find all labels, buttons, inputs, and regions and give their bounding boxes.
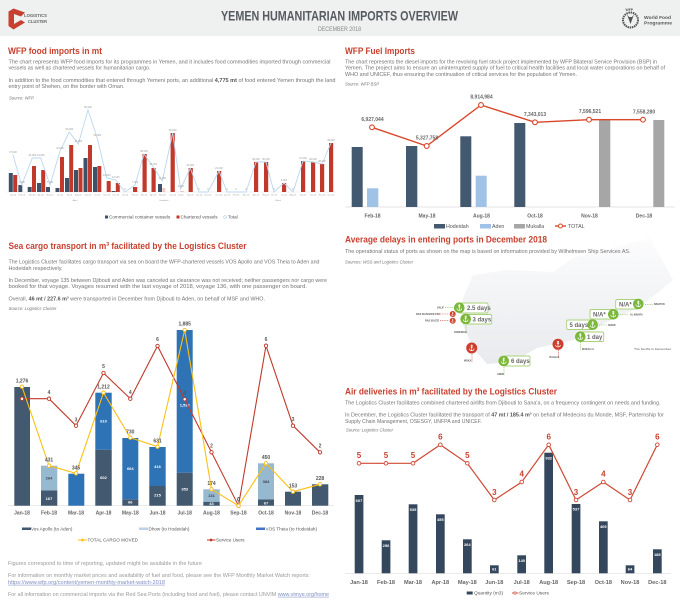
segment labels: 43 xyxy=(209,501,214,506)
text block: food imports description xyxy=(8,60,336,90)
bar value labels: 455 xyxy=(437,517,444,522)
segment labels: 664 xyxy=(127,466,134,471)
x axis labels: sea cargo: Feb-18 xyxy=(41,510,57,516)
icon: World Food Programme logo xyxy=(623,8,673,28)
x axis labels: fuel xyxy=(364,214,652,220)
segment labels: 384 xyxy=(263,479,270,484)
x axis labels: food imports: May-16 xyxy=(263,194,270,196)
x axis labels: sea cargo: Jan-18 xyxy=(14,510,30,516)
bars: Dhow xyxy=(41,463,274,502)
value labels: service users: 4 xyxy=(48,390,51,396)
port: Aden 6 days xyxy=(497,356,530,376)
legend: food imports: Total xyxy=(228,215,238,220)
value labels: service users: 5 xyxy=(384,451,389,460)
legend: sea cargo: Vos Apollo (to Aden) xyxy=(31,527,73,532)
legend: air deliveries: Quantity (m3) xyxy=(474,591,503,597)
value labels: service users: 2 xyxy=(210,444,213,450)
footer notes xyxy=(8,561,329,598)
chart: air deliveries xyxy=(345,432,671,586)
text block: fuel imports description: WHO and UNICEF, thus ensuring the continuation of critical services for the population of Yemen. xyxy=(345,72,577,78)
port: Hodeidah 3 days xyxy=(454,314,492,334)
x axis labels: food imports: Dec-16 xyxy=(216,194,223,196)
legend: sea cargo: Service Users xyxy=(216,538,245,543)
x axis labels: food imports: Jan-16 xyxy=(224,194,231,196)
port: Shihr 5 days xyxy=(567,319,616,330)
heading: fuel imports: WFP Fuel Imports xyxy=(345,46,415,57)
x axis labels: food imports: Dec-16 xyxy=(328,194,335,196)
x axis labels: food imports: Jul-16 xyxy=(66,194,73,196)
text block: food imports description: entry point of Shehen, on the border with Oman. xyxy=(8,84,124,90)
x axis labels: food imports: Nov-16 xyxy=(319,194,326,196)
legend: fuel imports xyxy=(434,224,585,230)
legend: air deliveries: Service Users xyxy=(519,591,549,597)
port: Shihr 5 days: 5 days xyxy=(570,323,589,329)
value labels: total: 0 xyxy=(292,188,294,191)
legend: fuel imports: Mukalla xyxy=(526,224,544,230)
source: food imports: Source: WFP xyxy=(9,96,34,100)
value labels: service users: 5 xyxy=(465,451,470,460)
bar value labels: 535 xyxy=(410,507,417,512)
port: Ras Isa closed xyxy=(425,318,456,324)
port: Hodeidah 3 days: 3 days xyxy=(472,317,492,323)
value labels: total: 38,000 xyxy=(140,150,148,153)
x axis labels: food imports: Jun-16 xyxy=(170,194,177,196)
bar value labels: 537 xyxy=(573,506,580,512)
link: market watch: https://www.wfp.org/content/yemen-monthly-market-watch-2018 xyxy=(8,580,165,586)
x axis labels: air deliveries: Dec-18 xyxy=(648,580,666,586)
value labels: total: 3,000 xyxy=(177,185,184,188)
value labels: total: 59,000 xyxy=(169,129,177,132)
bar value labels: 932 xyxy=(545,456,553,460)
legend: food imports xyxy=(105,215,238,220)
panel: WFP fuel imports xyxy=(342,42,680,230)
x axis labels: sea cargo: Oct-18 xyxy=(258,510,274,516)
x axis labels: fuel: Nov-18 xyxy=(581,214,598,220)
x axis labels: air deliveries: Nov-18 xyxy=(621,580,639,586)
value labels: total: 30,000 xyxy=(262,158,270,161)
x axis labels: air deliveries: Oct-18 xyxy=(595,580,612,586)
value labels: total cargo: 1,276 xyxy=(16,378,28,384)
x axis labels: sea cargo: May-18 xyxy=(122,510,139,516)
port: Balhaf closed: BALHAF xyxy=(550,356,560,359)
port: Al Nashima N/A: AL MAHRA xyxy=(630,313,643,316)
value labels: total: 34,000 xyxy=(37,154,45,157)
value labels: service users xyxy=(357,432,660,497)
text block: food imports description: vessels as well as chartered vessels for humanitarian cargo. xyxy=(8,66,151,72)
value labels: service users: 3 xyxy=(492,488,497,497)
value labels: total: 28,000 xyxy=(318,160,326,163)
value labels: service users: 3 xyxy=(292,417,295,423)
value labels: total xyxy=(9,106,335,191)
x axis labels: sea cargo: Dec-18 xyxy=(312,510,328,516)
segment labels: 67 xyxy=(264,500,269,506)
line: total cargo moved xyxy=(20,328,322,507)
x axis labels: food imports: Jul-16 xyxy=(281,194,288,196)
value labels: total: 7,596,521 xyxy=(579,109,601,115)
x axis labels: food imports: May-16 xyxy=(47,194,54,196)
bar value labels xyxy=(356,456,661,572)
line: service users xyxy=(20,344,322,507)
title: YEMEN HUMANITARIAN IMPORTS OVERVIEW xyxy=(221,8,459,24)
port: Nishtun N/A: N/A* xyxy=(619,302,632,308)
bars: quantity xyxy=(355,453,662,573)
chart: fuel imports xyxy=(345,94,675,220)
text block: food imports description: The chart represents WFP food imports for its programmes in Yemen, and it includes food commodities imported through commercial xyxy=(8,60,330,66)
value labels: total: 30,000 xyxy=(309,158,317,161)
value labels: total xyxy=(361,94,655,142)
port: Saleef 2.5 days: 2.5 days xyxy=(467,306,491,312)
source: sea cargo: Source: Logistics Cluster xyxy=(8,306,57,311)
x axis labels: food imports: Jun-16 xyxy=(271,194,278,196)
legend: food imports: Chartered vessels xyxy=(180,215,218,220)
source: fuel imports: Source: WFP BSP xyxy=(345,82,379,86)
x axis labels: food imports: Mar-16 xyxy=(29,194,36,196)
segment labels: 167 xyxy=(46,496,53,501)
value labels: service users: 4 xyxy=(601,470,606,478)
value labels: total: 7,000 xyxy=(19,181,25,184)
segment labels: 215 xyxy=(154,492,162,498)
bar value labels: 61 xyxy=(492,566,497,572)
bar value labels: 64 xyxy=(628,566,633,572)
x axis labels: food imports: Aug-16 xyxy=(290,194,297,196)
legend: air deliveries xyxy=(467,591,549,597)
text block: sea cargo description: booked for that voyage. Voyages resumed with the last voyage of 2018, voyage 136, with one passenger on board. xyxy=(8,284,307,290)
x axis labels: food imports: Hodeidah xyxy=(160,200,169,202)
segment labels xyxy=(46,402,270,506)
line: service users xyxy=(357,443,659,502)
value labels: service users: 5 xyxy=(411,451,416,460)
value labels: total cargo: 228 xyxy=(316,476,324,482)
x axis labels: air deliveries: Jun-18 xyxy=(485,580,503,586)
value labels: total: 0 xyxy=(226,188,228,191)
text block: air deliveries description: Supply Chain Management, OSESGY, UNFPA and UNICEF. xyxy=(345,419,482,425)
x axis labels: air deliveries xyxy=(350,580,666,586)
value labels: total: 0 xyxy=(273,188,275,191)
legend: fuel imports: Aden xyxy=(492,224,504,230)
value labels: service users: 4 xyxy=(519,470,524,478)
x axis labels: food imports: Sep-16 xyxy=(187,194,194,196)
panel: WFP food imports xyxy=(0,42,340,222)
bars: VOS Theia xyxy=(68,330,193,506)
footer notes: For information on monthly market prices and availability of fuel and food, please see the WFP Monthly Market Watch reports: xyxy=(8,573,310,579)
port: Mokha closed: MOKA xyxy=(464,360,472,362)
x axis labels: sea cargo xyxy=(14,510,328,516)
value labels: service users: 5 xyxy=(102,364,105,370)
x axis labels: air deliveries: Apr-18 xyxy=(431,580,449,586)
map: Yemen xyxy=(463,238,673,364)
text block: sea cargo description: Hodeidah respectively. xyxy=(8,266,62,272)
value labels: total: 37,000 xyxy=(9,151,17,154)
x axis labels: food imports: Jun-16 xyxy=(57,194,64,196)
x axis labels: food imports: Jan-16 xyxy=(122,194,129,196)
x axis labels: food imports: Nov-16 xyxy=(103,194,111,196)
value labels: total: 12,000 xyxy=(112,176,120,179)
port: Al Nashima N/A xyxy=(590,309,643,320)
bar value labels: 264 xyxy=(464,542,471,547)
value labels: service users: 2 xyxy=(319,444,322,450)
bars: commercial container vessels xyxy=(9,158,162,192)
segment labels: 416 xyxy=(154,464,162,469)
legend: food imports: Commercial container vessels xyxy=(109,215,171,220)
text block: delays description: The operational status of ports as shown on the map is based on information provided by Wilhelmsen Ship Services AS. xyxy=(345,249,630,255)
footnote: no berths: *No berths in December xyxy=(634,347,671,351)
x axis labels: food imports: Jul-16 xyxy=(178,194,184,196)
subtitle: DECEMBER 2018 xyxy=(318,26,361,33)
legend: fuel imports: TOTAL xyxy=(568,224,585,230)
bar value labels: 140 xyxy=(518,558,526,563)
text block: sea cargo description xyxy=(8,260,327,302)
value labels: service users: 4 xyxy=(21,390,24,396)
x axis labels: food imports: Oct-16 xyxy=(196,194,203,196)
segment labels: 131 xyxy=(208,493,216,498)
value labels: total: 31,000 xyxy=(299,157,307,160)
value labels: total cargo xyxy=(16,322,324,504)
value labels: service users: 4 xyxy=(129,390,132,396)
text block: air deliveries description: In December, the Logistics Cluster facilitated the transport of 47 mt / 185.4 m³ on behalf of Medecins du Monde, MSF, Parternship for xyxy=(345,412,664,418)
x axis labels: fuel: May-18 xyxy=(419,214,436,220)
source: air deliveries: Source: Logistics Cluster xyxy=(346,428,394,432)
segment labels: 610 xyxy=(100,418,108,424)
value labels: total: 21,000 xyxy=(215,167,223,170)
value labels: total cargo: 450 xyxy=(262,455,270,461)
port: Shihr 5 days: SHIHR xyxy=(608,324,616,327)
bar value labels: 185 xyxy=(654,552,661,557)
value labels: total: 7,343,013 xyxy=(524,112,546,118)
value labels: service users: 5 xyxy=(357,451,362,460)
value labels: total: 8,914,984 xyxy=(470,94,493,100)
text block: sea cargo description: In December, voyage 135 between Djibouti and Aden was canceled as clearance was not received; neither passengers nor cargo were xyxy=(8,278,327,284)
value labels: service users: 3 xyxy=(75,418,78,424)
bars: VOS Apollo xyxy=(14,387,328,506)
value labels: total: 0 xyxy=(198,188,200,191)
segment labels: 66 xyxy=(128,499,133,504)
value labels: total cargo: 1,212 xyxy=(97,384,110,390)
value labels: total: 0 xyxy=(124,188,126,191)
value labels: service users: 6 xyxy=(655,432,660,442)
segment labels: 353 xyxy=(181,486,189,492)
x axis labels: food imports: Apr-16 xyxy=(38,194,45,196)
port: Nishtun N/A xyxy=(616,299,665,309)
icon: World Food Programme logo: World Food xyxy=(644,15,671,20)
port: Hodeidah 3 days: HODEIDAH xyxy=(454,331,467,334)
panel: average port delays map xyxy=(342,232,680,378)
x axis labels: food imports: Nov-16 xyxy=(205,194,212,196)
x axis labels: sea cargo: Apr-18 xyxy=(96,510,112,516)
chart: food imports bars and total line xyxy=(6,106,336,202)
x axis labels: fuel: Oct-18 xyxy=(527,214,543,220)
value labels: service users: 3 xyxy=(628,488,633,497)
line: total xyxy=(13,110,331,192)
value labels: service users: 6 xyxy=(265,337,268,343)
port: Mukalla 1 day: MUKALLA xyxy=(582,348,594,351)
value labels: total: 34,000 xyxy=(28,154,37,157)
value labels: total cargo: 345 xyxy=(72,466,80,472)
line: total xyxy=(370,103,645,148)
x axis labels: food imports: Saleef xyxy=(275,200,281,202)
x axis labels: air deliveries: Feb-18 xyxy=(377,580,395,586)
heading: delays: Average delays in entering ports in December 2018 xyxy=(345,234,547,246)
port: Mukalla 1 day: 1 day xyxy=(587,335,603,341)
value labels: service users: 0 xyxy=(237,497,240,503)
value labels: total: 0 xyxy=(235,188,237,191)
icon: Logistics Cluster logo xyxy=(8,8,48,30)
legend: sea cargo: VOS Theia (to Hodeidah) xyxy=(266,527,317,532)
x axis labels: food imports: Feb-16 xyxy=(233,194,240,196)
icon: Logistics Cluster logo: LOGISTICS xyxy=(24,13,47,18)
icon: Logistics Cluster logo: CLUSTER xyxy=(28,19,48,24)
x axis labels: fuel: Dec-18 xyxy=(636,214,652,220)
heading: food imports: WFP food imports in mt xyxy=(8,46,103,57)
value labels: total: 7,000 xyxy=(132,181,139,184)
port: Nishtun N/A: NISHTUN xyxy=(654,303,665,306)
value labels: total cargo: 174 xyxy=(207,481,216,487)
x axis labels: air deliveries: Sep-18 xyxy=(567,580,585,586)
x axis labels: food imports: Apr-16 xyxy=(253,194,260,196)
chart: sea cargo xyxy=(8,322,334,516)
value labels: total: 11,000 xyxy=(159,177,167,180)
x axis labels: air deliveries: Aug-18 xyxy=(539,580,558,586)
x axis labels: sea cargo: Mar-18 xyxy=(68,510,84,516)
bar value labels: 607 xyxy=(356,498,363,503)
value labels: total: 54,000 xyxy=(93,134,102,137)
bars: Mukalla xyxy=(599,120,664,207)
x axis labels: food imports: Sep-16 xyxy=(85,194,92,196)
icon: World Food Programme logo: WFP xyxy=(626,8,634,12)
text block: food imports description: In addition to the food commodities that entered through Yemeni ports, an additional 4,775 mt of food entered Yemen through the land xyxy=(8,78,336,84)
x axis labels: food imports: Mar-16 xyxy=(141,194,148,196)
value labels: total: 0 xyxy=(245,188,247,191)
value labels: total: 60,000 xyxy=(65,128,74,131)
bars: Hodeidah xyxy=(352,123,525,207)
header band xyxy=(0,0,680,36)
x axis labels: food imports: Oct-16 xyxy=(94,194,101,196)
value labels: service users: 6 xyxy=(438,432,443,442)
value labels: total: 41,000 xyxy=(56,147,64,150)
contact line with link: For all information on commercial imports via the Red Sea Ports (including food and fuel), please contact UNVIM www.vimye.org/home xyxy=(8,592,329,598)
panel: sea cargo transport xyxy=(0,238,340,548)
value labels: service users xyxy=(21,337,322,503)
panel: air deliveries xyxy=(342,384,680,605)
value labels: service users: 4 xyxy=(183,391,186,397)
x axis labels: food imports: Mar-16 xyxy=(243,194,250,196)
value labels: total: 7,000 xyxy=(47,181,54,184)
x axis labels: sea cargo: Aug-18 xyxy=(203,510,220,516)
x axis labels: food imports: Aug-16 xyxy=(75,194,82,196)
value labels: total: 5,327,758 xyxy=(416,136,438,142)
source: delays: Sources: WSS and Logistics Cluster xyxy=(345,260,414,264)
x axis labels: air deliveries: Jan-18 xyxy=(350,580,368,586)
value labels: total: 25,000 xyxy=(149,163,158,166)
x axis labels: food imports: Feb-16 xyxy=(18,194,26,196)
port: Aden 6 days: ADEN xyxy=(497,373,504,376)
value labels: total: 24,000 xyxy=(186,164,195,167)
x axis labels: food imports: Dec-16 xyxy=(112,194,120,196)
text block: air deliveries description: The Logistics Cluster facilitates combined chartered airlifts from Djibouti to Sana'a, on a frequency contingent on needs and funding. xyxy=(345,400,661,406)
value labels: service users: 3 xyxy=(574,488,579,497)
x axis labels: sea cargo: Jul-18 xyxy=(177,510,192,516)
port: Ras Isa Safer FSO closed: RAS ISA/SAFER FSO xyxy=(416,313,440,316)
legend: sea cargo xyxy=(22,527,317,543)
port: Saleef 2.5 days xyxy=(437,302,491,313)
value labels: total: 30,000 xyxy=(252,158,260,161)
x axis labels: food imports: Sep-16 xyxy=(300,194,307,196)
heading: sea cargo: Sea cargo transport in m³ facilitated by the Logistics Cluster xyxy=(8,241,247,252)
legend: fuel imports: Hodeidah xyxy=(446,224,469,230)
text block: air deliveries description xyxy=(345,400,664,425)
port: Al Nashima N/A: N/A* xyxy=(593,312,606,318)
text block: fuel imports description: The chart represents the diesel imports for the revolving fuel stock project implemented by WFP Bilateral Service Provision (BSP) in xyxy=(345,59,657,65)
port: Balhaf closed xyxy=(550,339,564,359)
value labels: service users: 6 xyxy=(546,432,551,442)
value labels: total cargo: 631 xyxy=(153,438,162,444)
value labels: total: 0 xyxy=(207,188,209,191)
text block: sea cargo description: The Logistics Cluster facilitates cargo transport via sea on board the WFP-chartered vessels VOS Apollo and VOS Theia to Aden and xyxy=(8,260,320,266)
x axis labels: food imports: Apr-16 xyxy=(150,194,157,196)
x axis labels: food imports: Jan-16 xyxy=(10,194,17,196)
bars: Aden xyxy=(367,176,487,207)
text block: sea cargo description: Overall, 46 mt / 227.6 m³ were transported in December from Djibouti to Aden, on behalf of MSF and WHO. xyxy=(8,296,265,302)
bar value labels: 256 xyxy=(383,543,390,548)
x axis labels: fuel: Feb-18 xyxy=(364,214,381,220)
value labels: total: 9,000 xyxy=(281,179,288,182)
legend: sea cargo: Dhow (to Hodeidah) xyxy=(148,527,190,532)
segment labels: 602 xyxy=(100,475,108,480)
x axis labels: food imports xyxy=(10,194,335,202)
x axis labels: sea cargo: Sep-18 xyxy=(230,510,247,516)
footer notes: Figures correspond to time of reporting, updated might be available in the future xyxy=(8,561,202,567)
x axis labels: food imports: Oct-16 xyxy=(310,194,317,196)
x axis labels: air deliveries: Jul-18 xyxy=(514,580,530,586)
value labels: total cargo: 431 xyxy=(45,458,53,464)
value labels: total: 49,000 xyxy=(327,139,335,142)
value labels: total cargo: 153 xyxy=(289,484,297,490)
segment labels: 264 xyxy=(46,476,53,480)
x axis labels: food imports: May-16 xyxy=(159,194,167,196)
value labels: total: 14,000 xyxy=(103,174,111,177)
bars: chartered vessels xyxy=(13,133,333,192)
value labels: total cargo: 730 xyxy=(126,430,135,436)
port: Mokha closed xyxy=(464,342,477,362)
text block: fuel imports description xyxy=(345,59,666,78)
value labels: total cargo: 0 xyxy=(237,498,240,504)
port: Ras Isa closed: RAS ISA/ZIZ xyxy=(425,320,439,322)
port: Aden 6 days: 6 days xyxy=(511,359,530,365)
port: Ras Isa Safer FSO closed xyxy=(416,311,456,317)
x axis labels: food imports: Feb-16 xyxy=(132,194,139,196)
value labels: total: 48,000 xyxy=(74,140,83,143)
legend: sea cargo: TOTAL CARGO MOVED xyxy=(88,538,139,543)
x axis labels: fuel: Aug-18 xyxy=(473,214,490,220)
x axis labels: sea cargo: Nov-18 xyxy=(285,510,302,516)
value labels: total cargo: 1,885 xyxy=(178,322,191,328)
value labels: service users: 6 xyxy=(156,337,159,343)
text block: fuel imports description: Yemen. The project aims to ensure an uninterrupted supply of fuel to critical health facilities and local water corporations on behalf of xyxy=(345,66,666,72)
x axis labels: air deliveries: Mar-18 xyxy=(404,580,422,586)
bar value labels: 405 xyxy=(600,524,607,529)
x axis labels: air deliveries: May-18 xyxy=(458,580,477,586)
value labels: total: 6,927,044 xyxy=(361,117,384,123)
port: Saleef 2.5 days: SALIF xyxy=(437,306,444,310)
value labels: total: 7,558,280 xyxy=(633,110,655,116)
segment labels: 1,532 xyxy=(180,402,190,408)
port: Mukalla 1 day xyxy=(575,331,604,351)
heading: air deliveries: Air deliveries in m³ facilitated by the Logistics Cluster xyxy=(345,386,557,398)
x axis labels: sea cargo: Jun-18 xyxy=(149,510,166,516)
x axis labels: food imports: Aden xyxy=(73,199,78,202)
value labels: total: 82,000 xyxy=(84,106,92,109)
icon: World Food Programme logo: Programme xyxy=(644,20,673,26)
